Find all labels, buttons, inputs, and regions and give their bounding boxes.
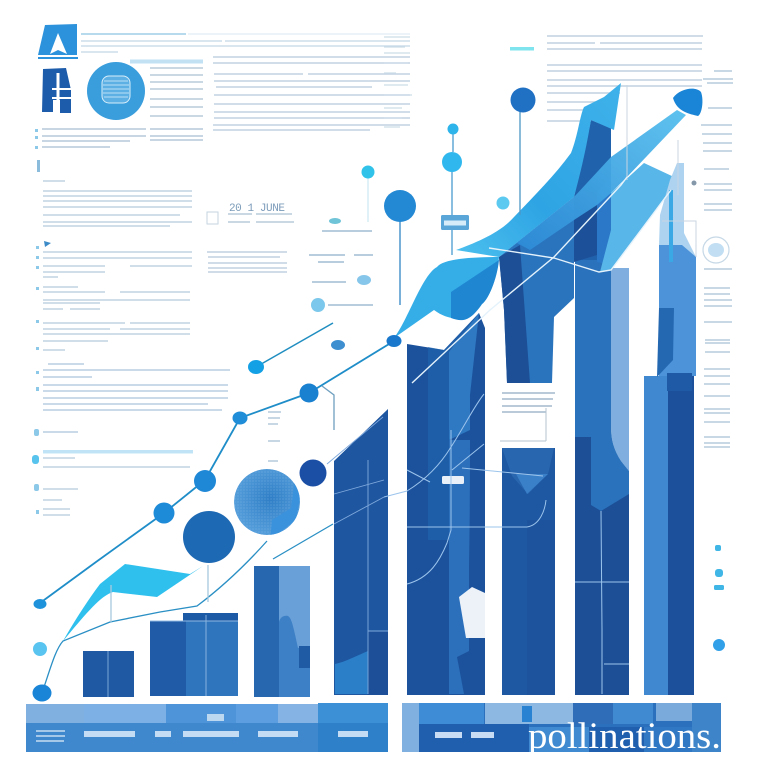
bar 6 <box>502 448 555 695</box>
area ribbon: fold dark block <box>574 190 597 262</box>
bar 2 <box>150 613 238 696</box>
text block: centre labels with icons <box>309 218 373 350</box>
area ribbon: large rising wave <box>456 83 621 257</box>
text block: small list <box>42 129 203 147</box>
area ribbon: dark fold <box>574 120 611 260</box>
chart callout: textured globe <box>234 469 302 540</box>
text block: badge caption lines <box>150 68 203 116</box>
area ribbon: lower wave <box>394 257 499 338</box>
icon: dark emblem <box>42 68 71 113</box>
rear column shade <box>499 245 530 383</box>
icon: section tag <box>37 160 40 172</box>
icons: right side dots <box>713 545 725 651</box>
area ribbon: parallelogram <box>600 163 674 272</box>
text block: date callout: 20 1 JUNE <box>229 203 285 215</box>
text block: lower left rows <box>43 450 193 515</box>
text block: centre paragraph two <box>207 252 287 272</box>
connector stems <box>111 110 520 622</box>
icon: top logo <box>38 24 78 59</box>
footer band: left <box>26 703 388 752</box>
data point nodes <box>32 88 536 702</box>
watermark: pollinations. <box>528 716 721 757</box>
text block: right upper paragraph <box>547 36 703 121</box>
text block: header body lines <box>81 41 410 52</box>
text block: mid bar caption <box>500 393 555 441</box>
callout: cyan accent <box>510 47 534 50</box>
text block: left section one <box>43 181 192 226</box>
line chart: branch segment <box>256 323 333 367</box>
footer band: right <box>402 703 721 752</box>
text block: upper middle fragment <box>384 37 412 127</box>
text block: date callout <box>207 203 294 224</box>
white trend overlay on bars <box>384 394 629 694</box>
text block: left section two <box>43 252 192 350</box>
line chart top lines <box>412 177 671 383</box>
chart callout: value tag <box>441 215 469 230</box>
bar 8 <box>644 163 696 695</box>
bar chart <box>83 197 629 697</box>
bar 5 <box>407 313 485 695</box>
text block: header rule <box>188 33 410 35</box>
bar 3 <box>254 566 310 697</box>
line chart: upper trend line <box>40 341 394 603</box>
text block: badge caption heading <box>130 60 203 64</box>
text block: header lines <box>81 33 186 35</box>
area ribbon: lower left <box>63 564 203 641</box>
area ribbon: fold light edge <box>597 178 611 265</box>
chart callout: large dark circle <box>183 511 235 563</box>
icon: flag marker <box>44 241 51 247</box>
area ribbon: shaded fold <box>451 260 499 320</box>
text block: lower left paragraph <box>43 364 230 432</box>
chart thin frame lines <box>627 85 696 257</box>
icon: small marker <box>692 180 696 186</box>
icons: left margin markers <box>32 129 39 514</box>
chart callout: dark node <box>300 460 326 486</box>
text block: right column <box>701 71 733 447</box>
icon: right seal <box>703 237 729 263</box>
bar 1 <box>83 651 134 697</box>
text block: upper centre paragraph <box>213 57 410 130</box>
line chart: lower trend line <box>42 524 333 693</box>
text block: small labels near chart <box>268 412 281 461</box>
bar 4 <box>327 409 388 695</box>
icon: circular badge <box>87 62 145 120</box>
rear column <box>499 197 574 383</box>
bar 7 <box>575 250 629 695</box>
area ribbon: mid band <box>499 110 686 257</box>
arrow head <box>673 89 702 116</box>
